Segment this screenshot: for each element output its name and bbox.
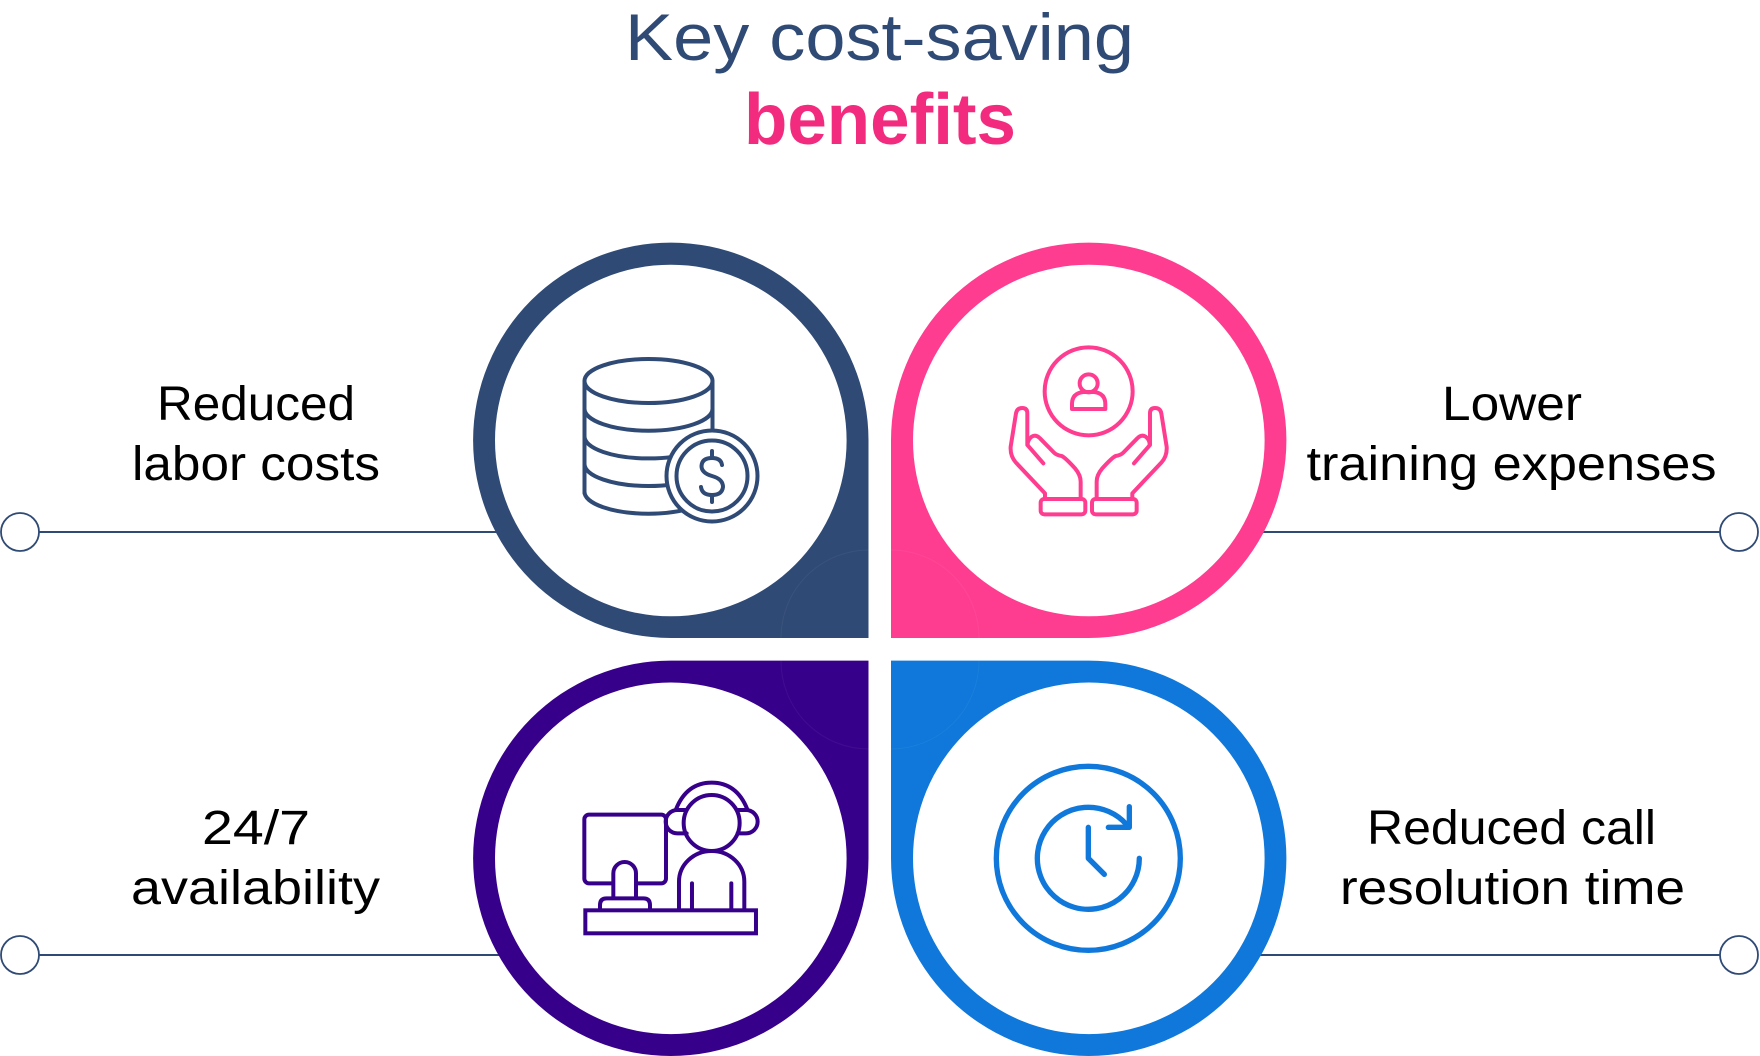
connector: training expenses (1260, 513, 1758, 551)
text: 24/7 availability: 24/7 (202, 802, 310, 855)
icon: support agent at desk (584, 783, 758, 933)
icon: hands holding person (1011, 347, 1167, 514)
title: benefits (744, 80, 1016, 160)
text: 24/7 availability (131, 802, 380, 915)
connector: call resolution (1255, 936, 1758, 974)
title (625, 0, 1134, 160)
text: reduced call resolution time: resolution time (1340, 862, 1685, 915)
text: 24/7 availability: availability (131, 862, 380, 915)
panel: training expenses drop (891, 243, 1286, 638)
text: lower training expenses: Lower (1442, 378, 1582, 431)
text: reduced labor costs: labor costs (132, 438, 380, 491)
panel: availability drop (473, 661, 868, 1056)
connector: availability (1, 936, 505, 974)
connector: labor costs (1, 513, 500, 551)
icon: coin stack (584, 359, 758, 522)
text: reduced call resolution time: Reduced call (1367, 802, 1656, 855)
text: reduced call resolution time (1340, 802, 1685, 915)
text: reduced labor costs (132, 378, 380, 491)
text: lower training expenses (1306, 378, 1716, 491)
title: Key cost-saving (625, 0, 1134, 74)
panel: call resolution drop (891, 661, 1286, 1056)
text: reduced labor costs: Reduced (157, 378, 355, 431)
icon: clock with arrow (996, 766, 1180, 950)
panel: labor costs drop (473, 243, 869, 638)
text: lower training expenses: training expenses (1306, 438, 1716, 491)
